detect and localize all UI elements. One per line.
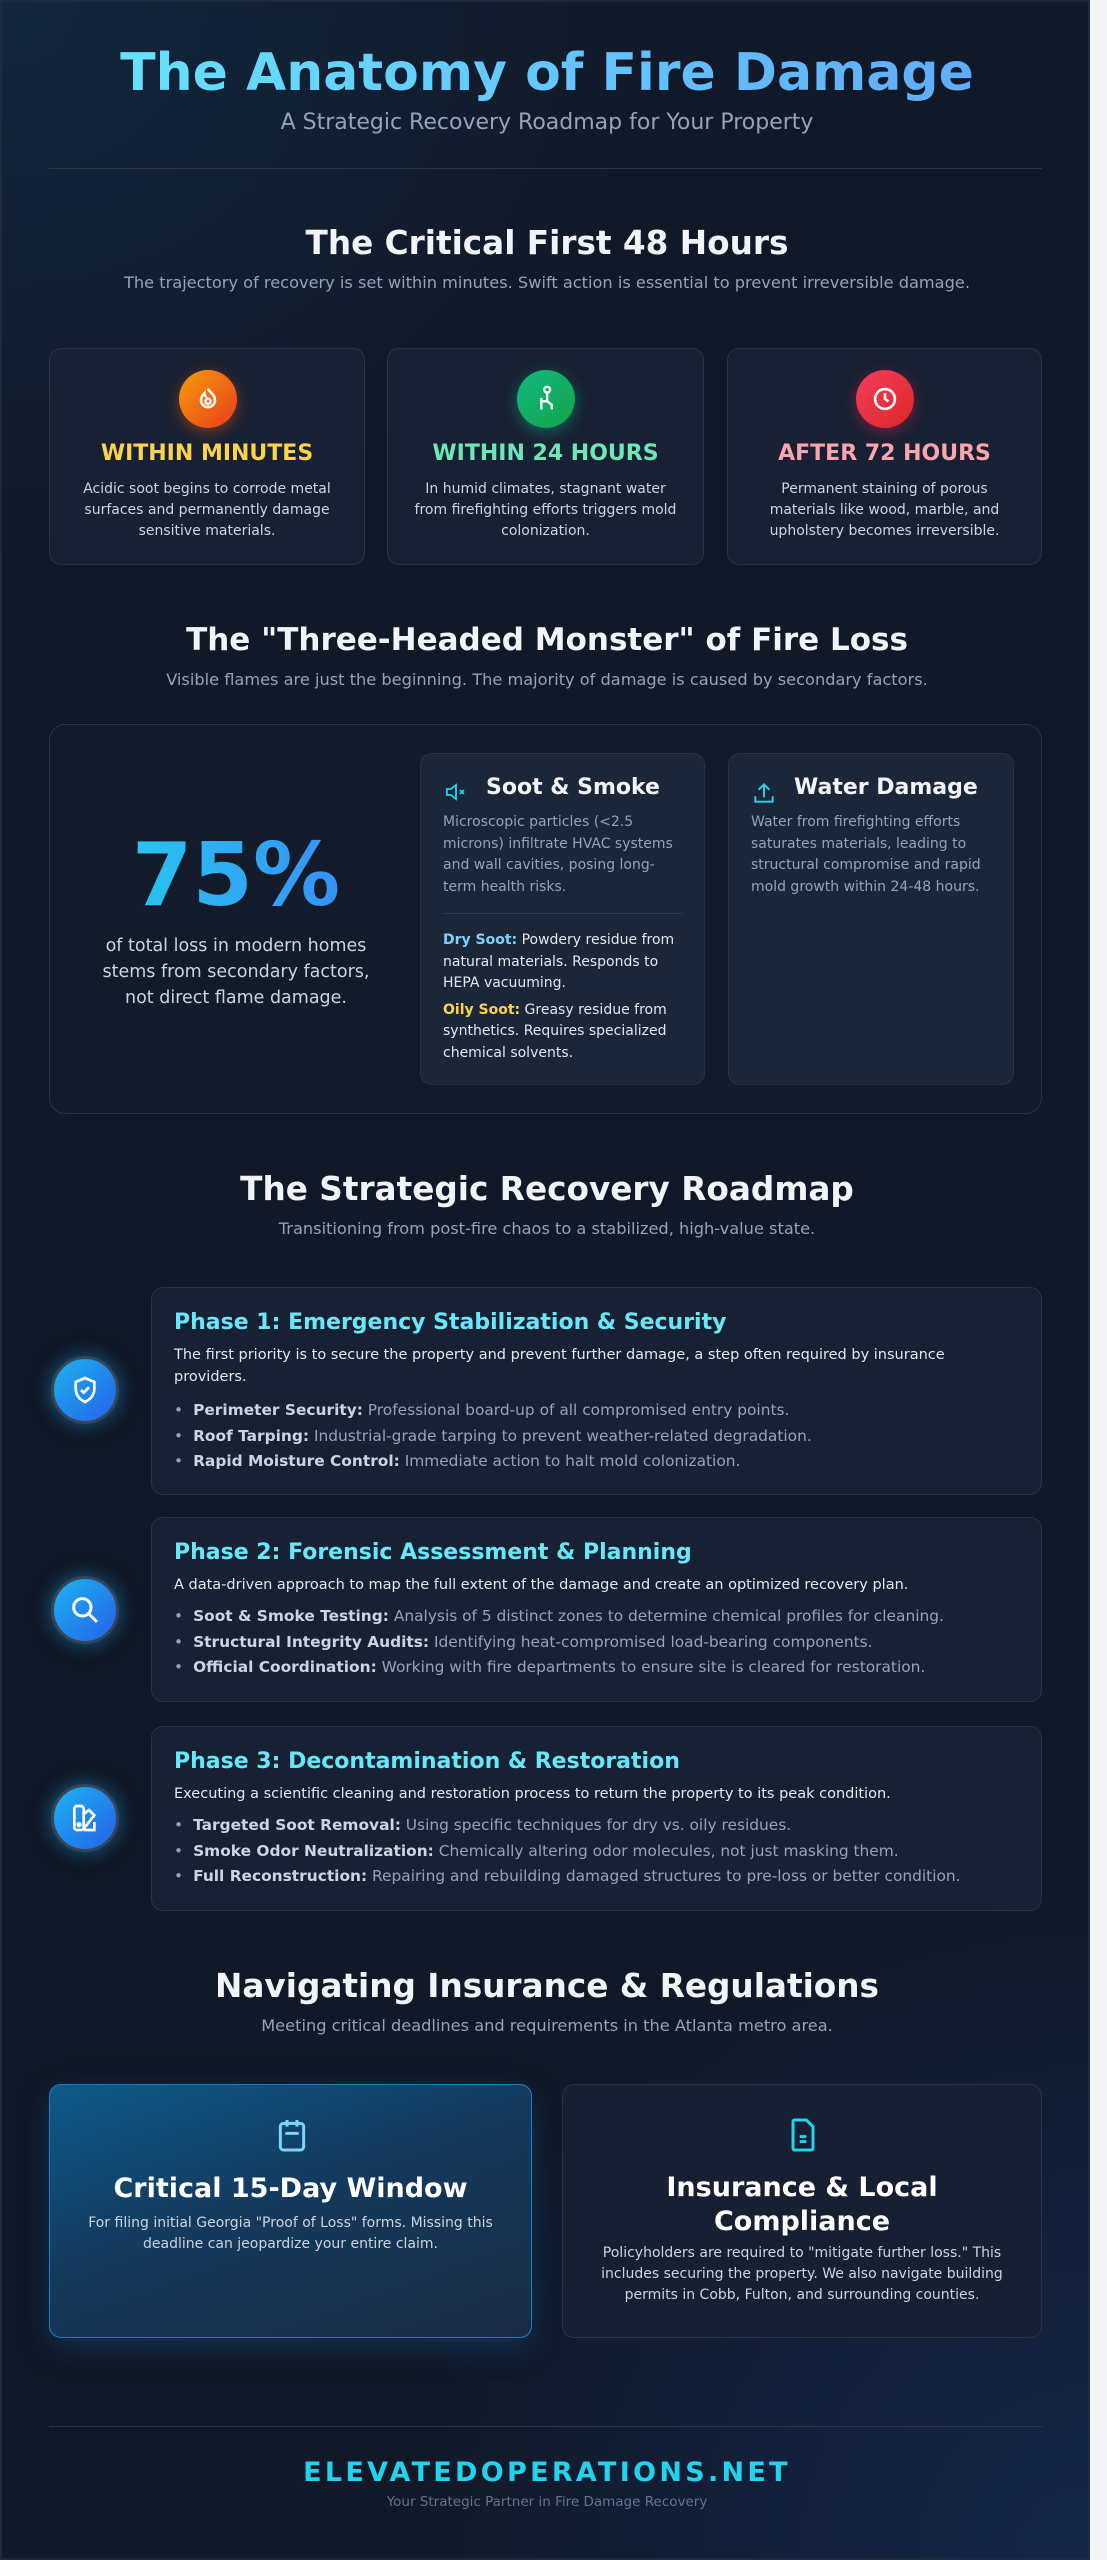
phase 3 card: Smoke Odor Neutralization: Chemically altering odor molecules, not just masking them. xyxy=(193,1842,899,1860)
card: water damage xyxy=(728,753,1014,1085)
phase 2 card: Phase 2: Forensic Assessment & Planning xyxy=(174,1540,692,1565)
title: Insurance & Local xyxy=(666,2172,938,2203)
heading: three-headed monster: The "Three-Headed Monster" of Fire Loss xyxy=(186,622,908,658)
phase 1 card xyxy=(151,1287,1042,1495)
heading: critical 48 hours: The Critical First 48 Hours xyxy=(306,224,788,262)
subtitle: A Strategic Recovery Roadmap for Your Property xyxy=(281,110,813,135)
subheading: Transitioning from post-fire chaos to a stabilized, high-value state. xyxy=(279,1219,815,1238)
icon: smoke xyxy=(446,783,465,801)
stat: 75%: 75% xyxy=(132,824,340,926)
phase 1 card: Roof Tarping: Industrial-grade tarping to prevent weather-related degradation. xyxy=(193,1426,812,1444)
text: Water from firefighting efforts saturates materials, leading to structural compromise and rapid mold growth within 24-48 hours. xyxy=(751,814,981,894)
subheading: Meeting critical deadlines and requirements in the Atlanta metro area. xyxy=(261,2016,833,2035)
card: soot & smoke xyxy=(420,753,705,1085)
phase 1 card: Rapid Moisture Control: Immediate action to halt mold colonization. xyxy=(193,1452,740,1470)
stat: 75%: stems from secondary factors, xyxy=(103,962,369,982)
phase 2 card: A data-driven approach to map the full extent of the damage and create an optimized recovery plan. xyxy=(174,1577,908,1593)
phase 3 card: Executing a scientific cleaning and restoration process to return the property to its peak condition. xyxy=(174,1786,891,1802)
soot types xyxy=(443,932,674,1060)
label: WITHIN 24 HOURS xyxy=(432,441,659,466)
phase 1 card: Perimeter Security: Professional board-up of all compromised entry points. xyxy=(193,1401,789,1419)
text: In humid climates, stagnant water from firefighting efforts triggers mold colonization. xyxy=(415,481,676,539)
icon: swatch xyxy=(51,1784,119,1852)
icon: clock xyxy=(856,370,914,428)
stat: 75%: not direct flame damage. xyxy=(125,988,347,1008)
card: within 24 hours xyxy=(387,348,704,565)
phase 3 card: Phase 3: Decontamination & Restoration xyxy=(174,1749,680,1774)
stat: 75% xyxy=(103,824,369,1008)
label: AFTER 72 HOURS xyxy=(778,441,991,466)
text: Acidic soot begins to corrode metal surfaces and permanently damage sensitive materials. xyxy=(83,481,331,539)
phase 3 card xyxy=(151,1726,1042,1911)
icon: water upload xyxy=(754,783,774,803)
title xyxy=(666,2172,938,2237)
subheading: The trajectory of recovery is set within minutes. Swift action is essential to prevent irreversible damage. xyxy=(124,273,970,292)
phase 2 card: Structural Integrity Audits: Identifying heat-compromised load-bearing components. xyxy=(193,1632,873,1650)
icon: person xyxy=(517,370,575,428)
phase 1 card: Phase 1: Emergency Stabilization & Security xyxy=(174,1310,726,1335)
title: Water Damage xyxy=(794,775,978,800)
title: Compliance xyxy=(714,2206,890,2237)
icon: fire xyxy=(179,370,237,428)
icon: document xyxy=(792,2118,814,2152)
text: For filing initial Georgia "Proof of Loss" forms. Missing this deadline can jeopardize your entire claim. xyxy=(88,2215,493,2252)
text: Microscopic particles (<2.5 microns) infiltrate HVAC systems and wall cavities, posing long-term health risks. xyxy=(443,814,673,894)
phase 3 card: Full Reconstruction: Repairing and rebuilding damaged structures to pre-loss or better condition. xyxy=(193,1867,961,1885)
title: Critical 15-Day Window xyxy=(113,2173,468,2204)
card: within minutes xyxy=(49,348,365,565)
footer tagline: Your Strategic Partner in Fire Damage Recovery xyxy=(387,2494,707,2510)
soot types: Oily Soot: Greasy residue from synthetics. Requires specialized chemical solvents. xyxy=(443,1002,667,1060)
card: after 72 hours xyxy=(727,348,1042,565)
text: Permanent staining of porous materials like wood, marble, and upholstery becomes irreversible. xyxy=(770,481,999,539)
subheading: Visible flames are just the beginning. The majority of damage is caused by secondary factors. xyxy=(166,670,928,689)
phase 3 card: Targeted Soot Removal: Using specific techniques for dry vs. oily residues. xyxy=(193,1816,791,1834)
panel: secondary damage xyxy=(49,724,1042,1114)
heading: roadmap: The Strategic Recovery Roadmap xyxy=(240,1170,854,1208)
phase 2 card: Soot & Smoke Testing: Analysis of 5 distinct zones to determine chemical profiles for cleaning. xyxy=(193,1607,944,1625)
stat: 75%: of total loss in modern homes xyxy=(106,936,366,956)
title: The Anatomy of Fire Damage xyxy=(120,43,974,103)
phase 2 card xyxy=(151,1517,1042,1702)
phase 2 card: Official Coordination: Working with fire departments to ensure site is cleared for restoration. xyxy=(193,1658,925,1676)
label: WITHIN MINUTES xyxy=(101,441,313,466)
card: compliance xyxy=(562,2084,1042,2338)
soot types: Dry Soot: Powdery residue from natural materials. Responds to HEPA vacuuming. xyxy=(443,932,674,991)
heading: insurance: Navigating Insurance & Regulations xyxy=(215,1967,879,2005)
icon: shield xyxy=(51,1356,119,1424)
title: Soot & Smoke xyxy=(486,775,660,800)
card: 15-day window xyxy=(49,2084,532,2338)
phase 1 card: The first priority is to secure the property and prevent further damage, a step often required by insurance providers. xyxy=(174,1347,945,1385)
footer brand: ELEVATEDOPERATIONS.NET xyxy=(303,2457,791,2488)
icon: search xyxy=(51,1576,119,1644)
text: Policyholders are required to "mitigate further loss." This includes securing the property. We also navigate building permits in Cobb, Fulton, and surrounding counties. xyxy=(601,2245,1003,2303)
icon: calendar xyxy=(278,2120,306,2152)
